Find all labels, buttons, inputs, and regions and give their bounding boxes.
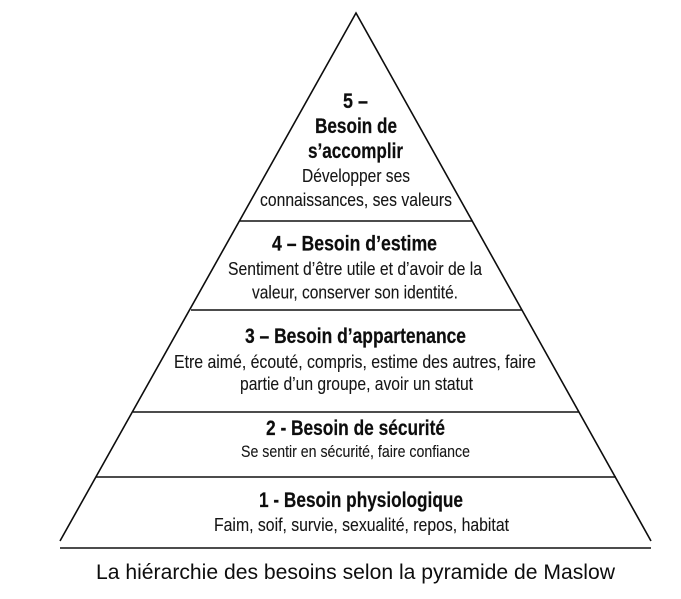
- level 5: self-actualisation: Développer ses: [302, 165, 410, 186]
- level 3: belonging: [174, 325, 536, 394]
- base line: [60, 547, 651, 549]
- level 4: esteem: 4 – Besoin d’estime: [272, 232, 437, 256]
- level 4: esteem: [228, 232, 483, 302]
- level 2: safety: Se sentir en sécurité, faire confiance: [241, 442, 470, 461]
- level 1: physiological: Faim, soif, survie, sexualité, repos, habitat: [214, 514, 509, 535]
- level 5: self-actualisation: 5 –: [343, 90, 368, 113]
- level 1: physiological: [214, 489, 509, 535]
- level 3: belonging: Etre aimé, écouté, compris, estime des autres, faire: [174, 351, 536, 372]
- level 1: physiological: 1 - Besoin physiologique: [259, 489, 463, 512]
- level 4: esteem: Sentiment d’être utile et d’avoir de la: [228, 258, 483, 279]
- pyramid outline: [60, 13, 651, 541]
- level 2: safety: 2 - Besoin de sécurité: [266, 417, 445, 440]
- level 5: self-actualisation: s’accomplir: [308, 140, 403, 163]
- level 3: belonging: partie d’un groupe, avoir un statut: [240, 373, 473, 394]
- level 2: safety: [241, 417, 470, 461]
- caption: La hiérarchie des besoins selon la pyramide de Maslow: [96, 561, 616, 584]
- level 5: self-actualisation: Besoin de: [315, 115, 397, 138]
- level 4: esteem: valeur, conserver son identité.: [252, 282, 458, 302]
- level 5: self-actualisation: connaissances, ses valeurs: [260, 189, 452, 210]
- level 5: self-actualisation: [260, 90, 452, 210]
- level 3: belonging: 3 – Besoin d’appartenance: [245, 325, 466, 348]
